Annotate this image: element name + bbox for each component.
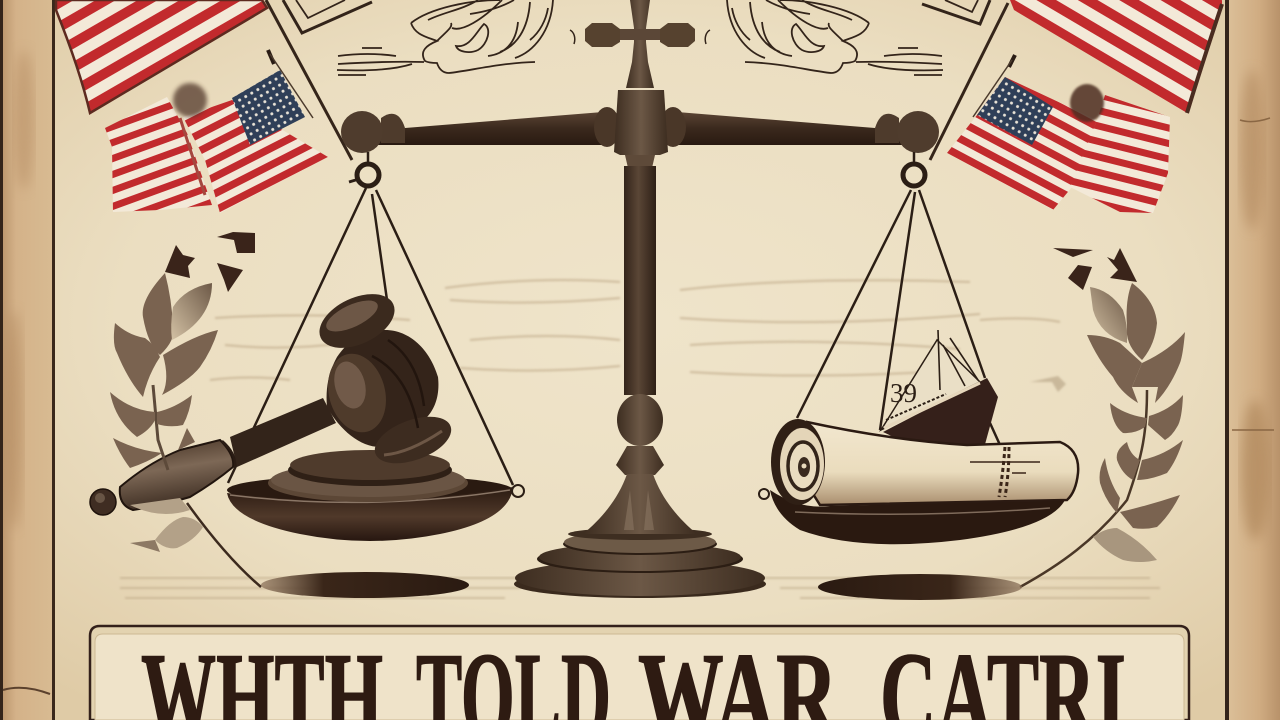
scale cross finial xyxy=(585,0,695,88)
left pan cords xyxy=(228,152,513,485)
top left large flag xyxy=(56,0,352,160)
left small flag xyxy=(105,50,328,213)
central column xyxy=(514,90,766,598)
balance scale xyxy=(228,0,1000,598)
top frame ornaments xyxy=(283,0,990,75)
left pan xyxy=(227,475,524,541)
scroll xyxy=(771,419,1078,505)
gavel xyxy=(90,283,457,515)
left ground shadow xyxy=(261,572,469,598)
scale beam xyxy=(341,107,939,153)
left laurel xyxy=(110,232,261,587)
right ground shadow xyxy=(818,574,1022,600)
title panel xyxy=(90,626,1189,720)
top right large flag xyxy=(930,0,1222,160)
gavel block xyxy=(268,450,468,502)
right pan xyxy=(759,489,1065,544)
right laurel xyxy=(1020,248,1185,587)
ship xyxy=(881,330,998,448)
right small flag xyxy=(947,55,1170,213)
title text xyxy=(142,654,1124,720)
right pan cords xyxy=(797,152,1000,445)
ship: 39 xyxy=(890,378,917,408)
